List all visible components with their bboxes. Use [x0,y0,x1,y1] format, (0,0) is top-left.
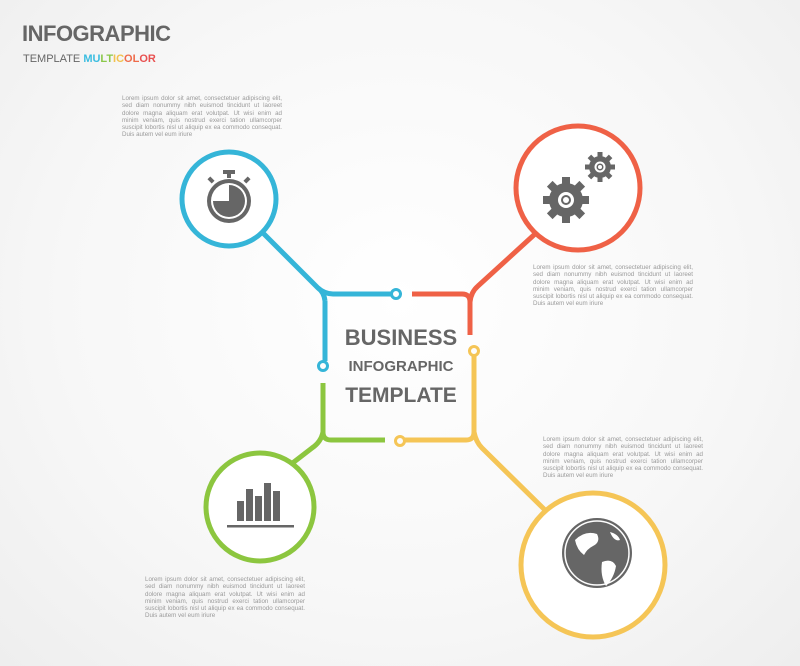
text block: right top: Lorem ipsum dolor sit amet, consectetuer adipiscing elit, sed diam nonummy nibh euismod tincidunt ut laoreet dolore magna aliquam erat volutpat. Ut wisi enim ad minim veniam, quis nostrud exerci tation ullamcorper suscipit lobortis nisl ut aliquip ex ea commodo consequat. Duis autem vel eum iriure [533,264,693,307]
icon: gears [543,152,615,223]
text block: bottom-left: Lorem ipsum dolor sit amet, consectetuer adipiscing elit, sed diam nonummy nibh euismod tincidunt ut laoreet dolore magna aliquam erat volutpat. Ut wisi enim ad minim veniam, quis nostrud exerci tation ullamcorper suscipit lobortis nisl ut aliquip ex ea commodo consequat. Duis autem vel eum iriure [145,576,305,619]
connector: blue [182,152,400,370]
title: INFOGRAPHIC [22,21,170,46]
text block: top-left: Lorem ipsum dolor sit amet, consectetuer adipiscing elit, sed diam nonummy nibh euismod tincidunt ut laoreet dolore magna aliquam erat volutpat. Ut wisi enim ad minim veniam, quis nostrud exerci tation ullamcorper suscipit lobortis nisl ut aliquip ex ea commodo consequat. Duis autem vel eum iriure [122,95,282,138]
center title: BUSINESS [345,325,457,350]
connector: green [206,383,385,561]
connector: orange [412,126,640,335]
icon: bar chart [227,483,294,528]
center title [345,325,457,407]
center title: INFOGRAPHIC [348,358,454,375]
subtitle: TEMPLATE MULTICOLOR [23,53,156,65]
connector: yellow [396,346,665,637]
text block: right bottom: Lorem ipsum dolor sit amet, consectetuer adipiscing elit, sed diam nonummy nibh euismod tincidunt ut laoreet dolore magna aliquam erat volutpat. Ut wisi enim ad minim veniam, quis nostrud exerci tation ullamcorper suscipit lobortis nisl ut aliquip ex ea commodo consequat. Duis autem vel eum iriure [543,436,703,479]
icon: stopwatch [207,170,251,223]
icon: globe [562,518,632,588]
center title: TEMPLATE [345,384,457,407]
